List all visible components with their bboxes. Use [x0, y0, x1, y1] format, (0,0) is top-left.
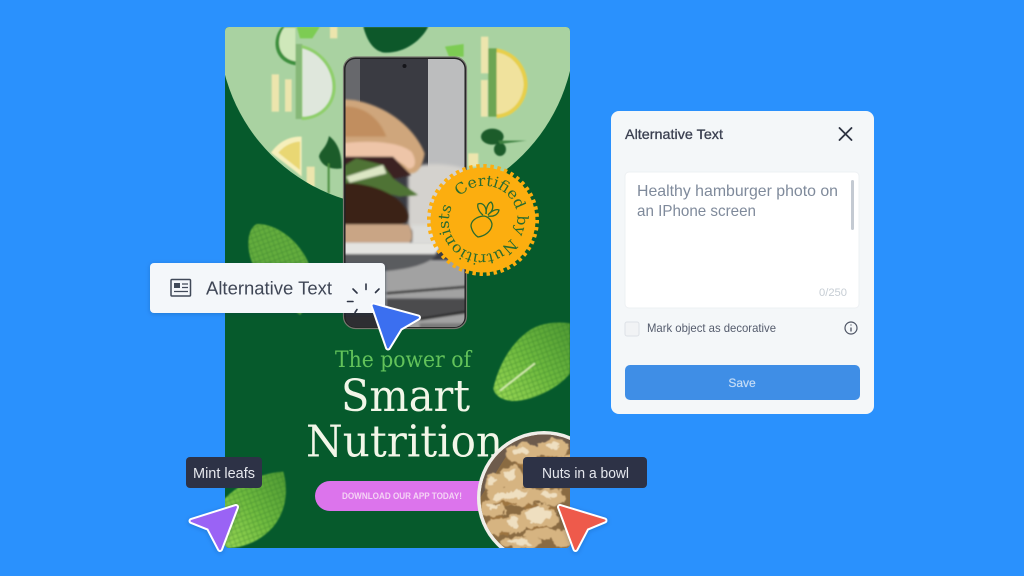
cursor: blue [374, 306, 418, 348]
tooltip: mint leafs [186, 457, 262, 488]
icon: info [845, 322, 857, 334]
icon: parsley left [319, 136, 342, 193]
checkbox: mark as decorative: Mark object as decorative [647, 321, 776, 335]
cursor: purple [192, 507, 236, 549]
button: download: DOWNLOAD OUR APP TODAY! [342, 491, 462, 501]
textarea [625, 172, 859, 308]
icon: click burst [348, 284, 379, 312]
light green semicircle with vegetables [225, 27, 570, 198]
phone [343, 57, 468, 332]
icon: parsley right [481, 129, 527, 156]
icon: beet [471, 202, 499, 237]
icon: green pieces [297, 27, 497, 117]
tooltip: nuts in a bowl [523, 457, 647, 488]
badge: certified seal [427, 164, 539, 276]
icon: lemon slice left [271, 137, 302, 177]
button: save: Save [728, 376, 756, 390]
cursor: red [560, 507, 604, 549]
icon: close [840, 128, 852, 140]
menu label: Alternative Text [206, 278, 332, 298]
heading: smart: Smart [341, 371, 470, 422]
icon: cucumber slice [276, 27, 296, 65]
tooltip: nuts in a bowl: Nuts in a bowl [542, 466, 629, 482]
icon: text card [171, 280, 190, 296]
icon: spinach leaf [363, 27, 428, 53]
heading: the power of: The power of [335, 348, 473, 373]
heading: nutrition: Nutrition [306, 416, 503, 468]
bowl of walnuts [477, 431, 570, 548]
textarea: 0/250 [819, 287, 847, 299]
infographic canvas [148, 27, 874, 554]
button: download [315, 481, 495, 511]
button: save [625, 365, 860, 400]
textarea: Healthy hamburger photo on [637, 183, 838, 200]
icon: cucumber sticks [272, 27, 488, 187]
icon: lemon slice right [497, 48, 528, 118]
icon: apple slice [296, 44, 336, 120]
panel heading: Alternative Text [625, 126, 723, 142]
poster [225, 27, 570, 548]
textarea: an IPhone screen [637, 203, 756, 220]
phone screen: burger photo [343, 58, 468, 332]
menu card: alternative text [150, 263, 385, 313]
leaf: upper left [248, 224, 312, 315]
seal text: Certified by Nutritionists [438, 176, 529, 265]
tooltip: mint leafs: Mint leafs [193, 466, 255, 482]
leaf: bottom left [223, 472, 286, 548]
panel: alternative text dialog [611, 111, 874, 414]
leaf: right [493, 322, 570, 401]
